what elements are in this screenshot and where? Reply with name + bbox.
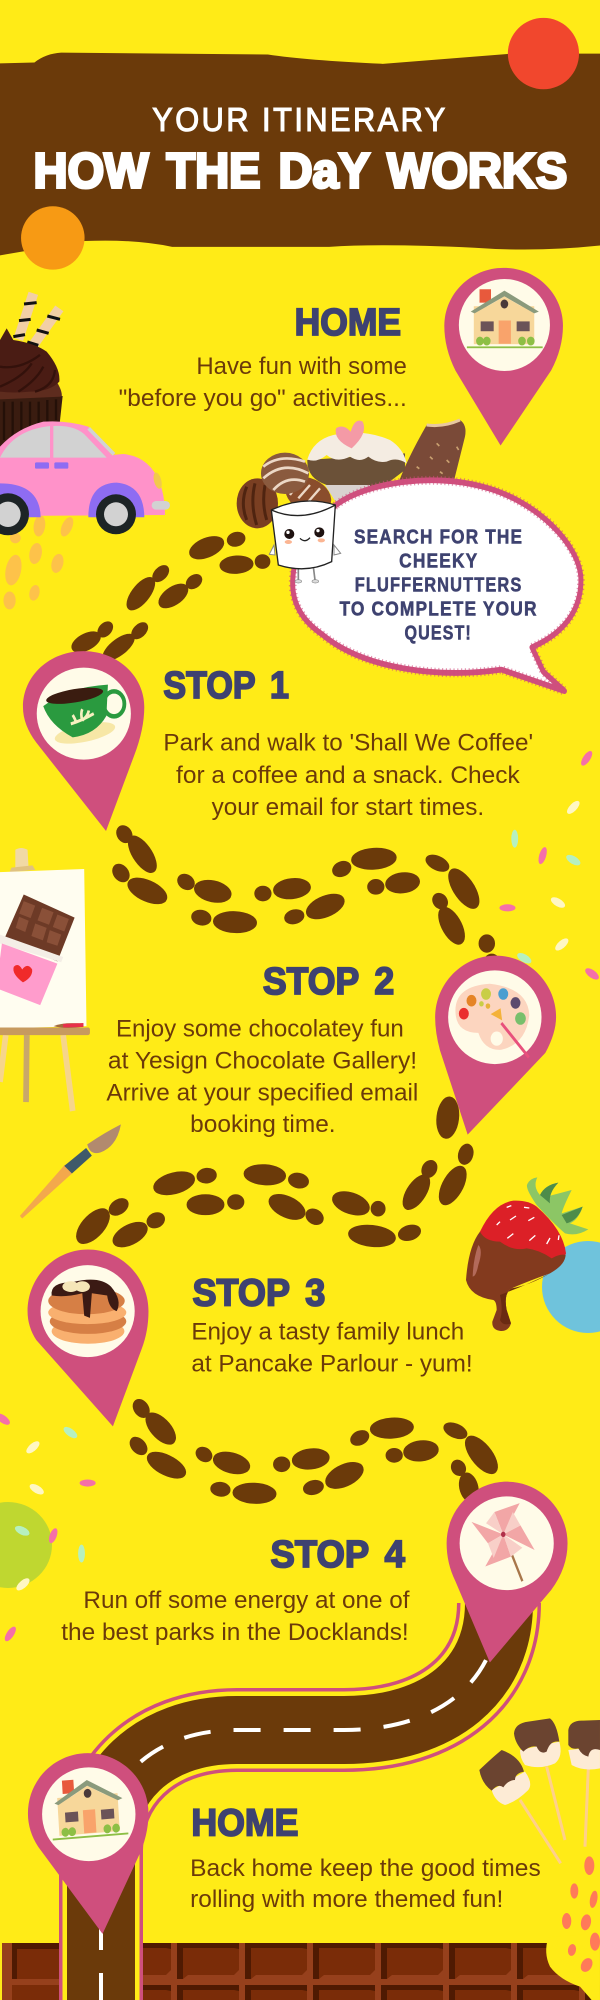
footprints stop 1 to stop 2 [111, 823, 499, 973]
stop 2 pin with palette [435, 956, 556, 1135]
stop 3 description: at Pancake Parlour - yum! [191, 1350, 473, 1377]
stop 4 description [61, 1587, 410, 1646]
stop 1 description: your email for start times. [212, 794, 484, 820]
sprinkles left [0, 1411, 96, 1643]
main title: HOW THE DaY WORKS [34, 143, 567, 198]
sprinkles right [499, 749, 600, 982]
orange circle [21, 206, 85, 270]
stop 3 pin with pancakes [28, 1250, 148, 1426]
stop 2 description: Arrive at your specified email [106, 1079, 418, 1106]
stop 1 heading: STOP 1 [163, 664, 289, 707]
footprints stop 3 to stop 4 [128, 1397, 502, 1504]
stop 4 description: the best parks in the Docklands! [61, 1619, 409, 1646]
home description [119, 353, 407, 412]
red circle [508, 18, 579, 89]
stop 4 heading: STOP 4 [271, 1533, 405, 1576]
footprints stop 2 to stop 3 [72, 1096, 475, 1251]
marshmallow character [269, 501, 341, 583]
home end description: Back home keep the good times [190, 1854, 541, 1881]
stop 2 description: Enjoy some chocolatey fun [116, 1015, 404, 1042]
stop 1 description: for a coffee and a snack. Check [176, 761, 521, 788]
home pin end [28, 1753, 148, 1934]
footprints to stop 1 [70, 531, 269, 664]
bubble text: SEARCH FOR THE [354, 525, 523, 548]
stop 2 description: booking time. [190, 1110, 336, 1137]
home pin [444, 268, 563, 446]
yellow bite with coral dots [546, 1856, 600, 2000]
stop 3 description [191, 1318, 473, 1377]
easel with chocolate painting [0, 848, 90, 1111]
home end description: rolling with more themed fun! [190, 1886, 503, 1912]
stop 2 heading: STOP 2 [263, 960, 394, 1003]
stop 3 heading: STOP 3 [192, 1271, 325, 1314]
paintbrush [20, 1124, 121, 1219]
bubble text: QUEST! [405, 621, 472, 644]
chocolate bar [2, 1943, 600, 2000]
stop 1 description: Park and walk to 'Shall We Coffee' [163, 729, 533, 756]
stop 3 description: Enjoy a tasty family lunch [191, 1318, 464, 1345]
green circle [0, 1502, 52, 1588]
title line one: YOUR ITINERARY [152, 101, 448, 138]
bubble text: CHEEKY [399, 549, 478, 572]
speech bubble [293, 480, 581, 691]
chocolate marshmallow pops [479, 1718, 600, 1863]
stop 2 description: at Yesign Chocolate Gallery! [108, 1047, 417, 1074]
pink car [0, 421, 170, 535]
home heading: HOME [295, 300, 401, 343]
stop 1 pin with coffee cup [23, 651, 144, 831]
home end heading: HOME [191, 1801, 299, 1844]
bubble text: TO COMPLETE YOUR [339, 597, 538, 620]
bubble text [339, 525, 538, 644]
home description: Have fun with some [196, 353, 407, 379]
banner shape [0, 53, 600, 255]
bubble text: FLUFFERNUTTERS [355, 573, 522, 596]
cupcake [0, 293, 63, 447]
peach dots [3, 514, 76, 609]
stop 2 description [106, 1015, 418, 1137]
title banner [0, 18, 600, 270]
road [101, 1603, 499, 2000]
stop 1 description [163, 729, 533, 820]
home description: "before you go" activities... [119, 385, 407, 412]
home end description [190, 1854, 541, 1912]
stop 4 pin with pinwheel [447, 1482, 568, 1662]
strawberry backdrop blue circle [542, 1241, 600, 1333]
chocolate strawberry [466, 1177, 588, 1331]
stop 4 description: Run off some energy at one of [83, 1587, 410, 1613]
sweets [237, 420, 466, 528]
